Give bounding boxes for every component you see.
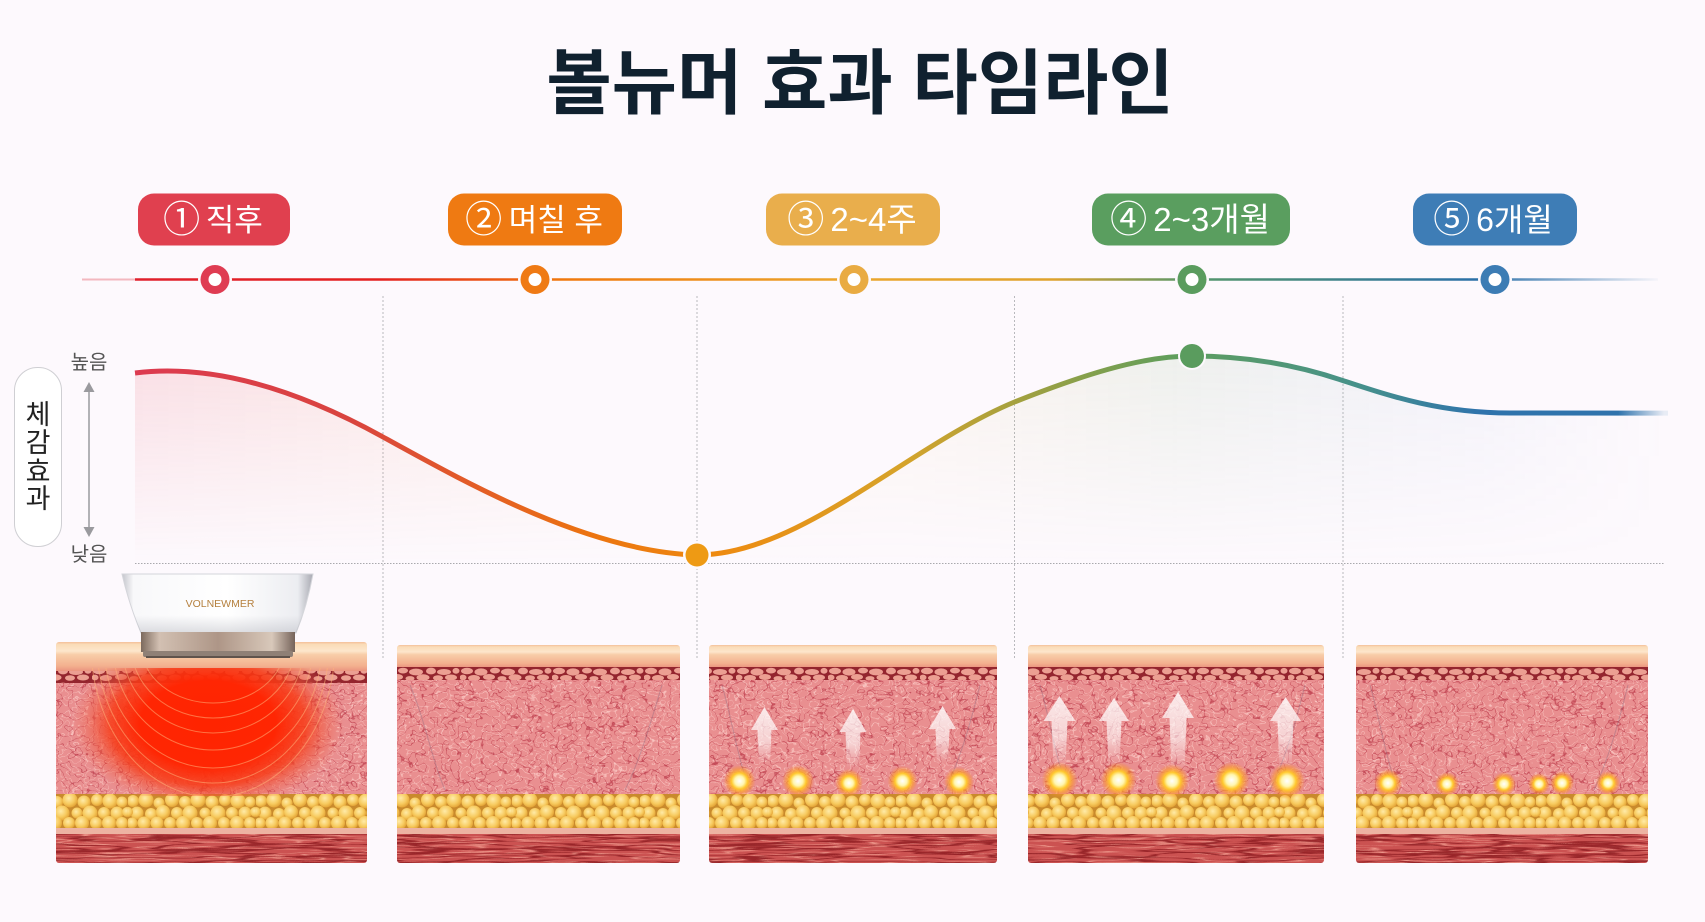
skin layers 1 <box>56 642 367 863</box>
device brand: VOLNEWMER <box>186 598 255 610</box>
timeline marker 2 <box>518 262 552 296</box>
y-axis label: perceived effect: 감 <box>26 428 50 458</box>
stage pill 5 <box>1413 194 1577 246</box>
dashed guide lines <box>135 296 1664 660</box>
skin layers 3 <box>709 645 997 863</box>
skin panel 1: immediately after <box>56 574 367 863</box>
collagen glow points 4 <box>1042 762 1305 799</box>
stage pill 1: ① <box>163 199 200 240</box>
timeline axis <box>82 262 1658 296</box>
curve area <box>135 359 1441 502</box>
stage pill 4: ④ <box>1110 199 1147 240</box>
chart: effect curve <box>135 342 1668 569</box>
stage pill 3: 2~4주 <box>821 201 917 238</box>
curve maximum point <box>1178 342 1206 370</box>
heat zone <box>76 668 340 796</box>
stage pill 3: ③ <box>787 199 824 240</box>
timeline line <box>82 278 1658 281</box>
skin panel 5: 6 months <box>1356 645 1648 863</box>
timeline marker 1 <box>198 262 232 296</box>
skin panel 3: 2 to 4 weeks <box>709 645 997 863</box>
curve minimum point <box>683 541 711 569</box>
skin panel 2: days after <box>397 645 680 863</box>
lift arrows 3 <box>751 706 956 768</box>
stage pill 4 <box>1092 194 1290 246</box>
stage pill 2: ② <box>465 199 502 240</box>
stage pill 2 <box>448 194 622 246</box>
y-axis double arrow <box>84 382 94 537</box>
low label: 낮음 <box>71 543 107 566</box>
curve line <box>135 356 1668 555</box>
lift arrows 4 <box>1044 692 1301 771</box>
y-axis label: perceived effect: 과 <box>26 484 50 514</box>
stage pill 4: 2~3개월 <box>1144 201 1270 238</box>
skin layers 5 <box>1356 645 1648 863</box>
stage pill 1 <box>138 194 290 246</box>
timeline marker 4 <box>1175 262 1209 296</box>
y-axis label: perceived effect: 효 <box>26 457 50 487</box>
title: 볼뉴머 효과 타임라인 <box>546 45 1174 124</box>
device: handpiece <box>122 574 313 658</box>
high label: 높음 <box>71 352 107 374</box>
timeline marker 3 <box>837 262 871 296</box>
stage pill 5: ⑤ <box>1433 199 1470 240</box>
collagen glow points 5 <box>1374 769 1620 797</box>
y-axis label: perceived effect: 체 <box>26 400 50 430</box>
timeline marker 5 <box>1478 262 1512 296</box>
stage pill 3 <box>766 194 940 246</box>
stage pill 5: 6개월 <box>1467 202 1553 238</box>
skin panel 4: 2 to 3 months <box>1028 645 1324 863</box>
collagen glow points 3 <box>724 765 974 797</box>
y-axis label: perceived effect <box>14 368 62 546</box>
skin layers 4 <box>1028 645 1324 863</box>
stage pill 2: 며칠 후 <box>500 203 603 238</box>
stage pill 1: 직후 <box>197 203 263 238</box>
